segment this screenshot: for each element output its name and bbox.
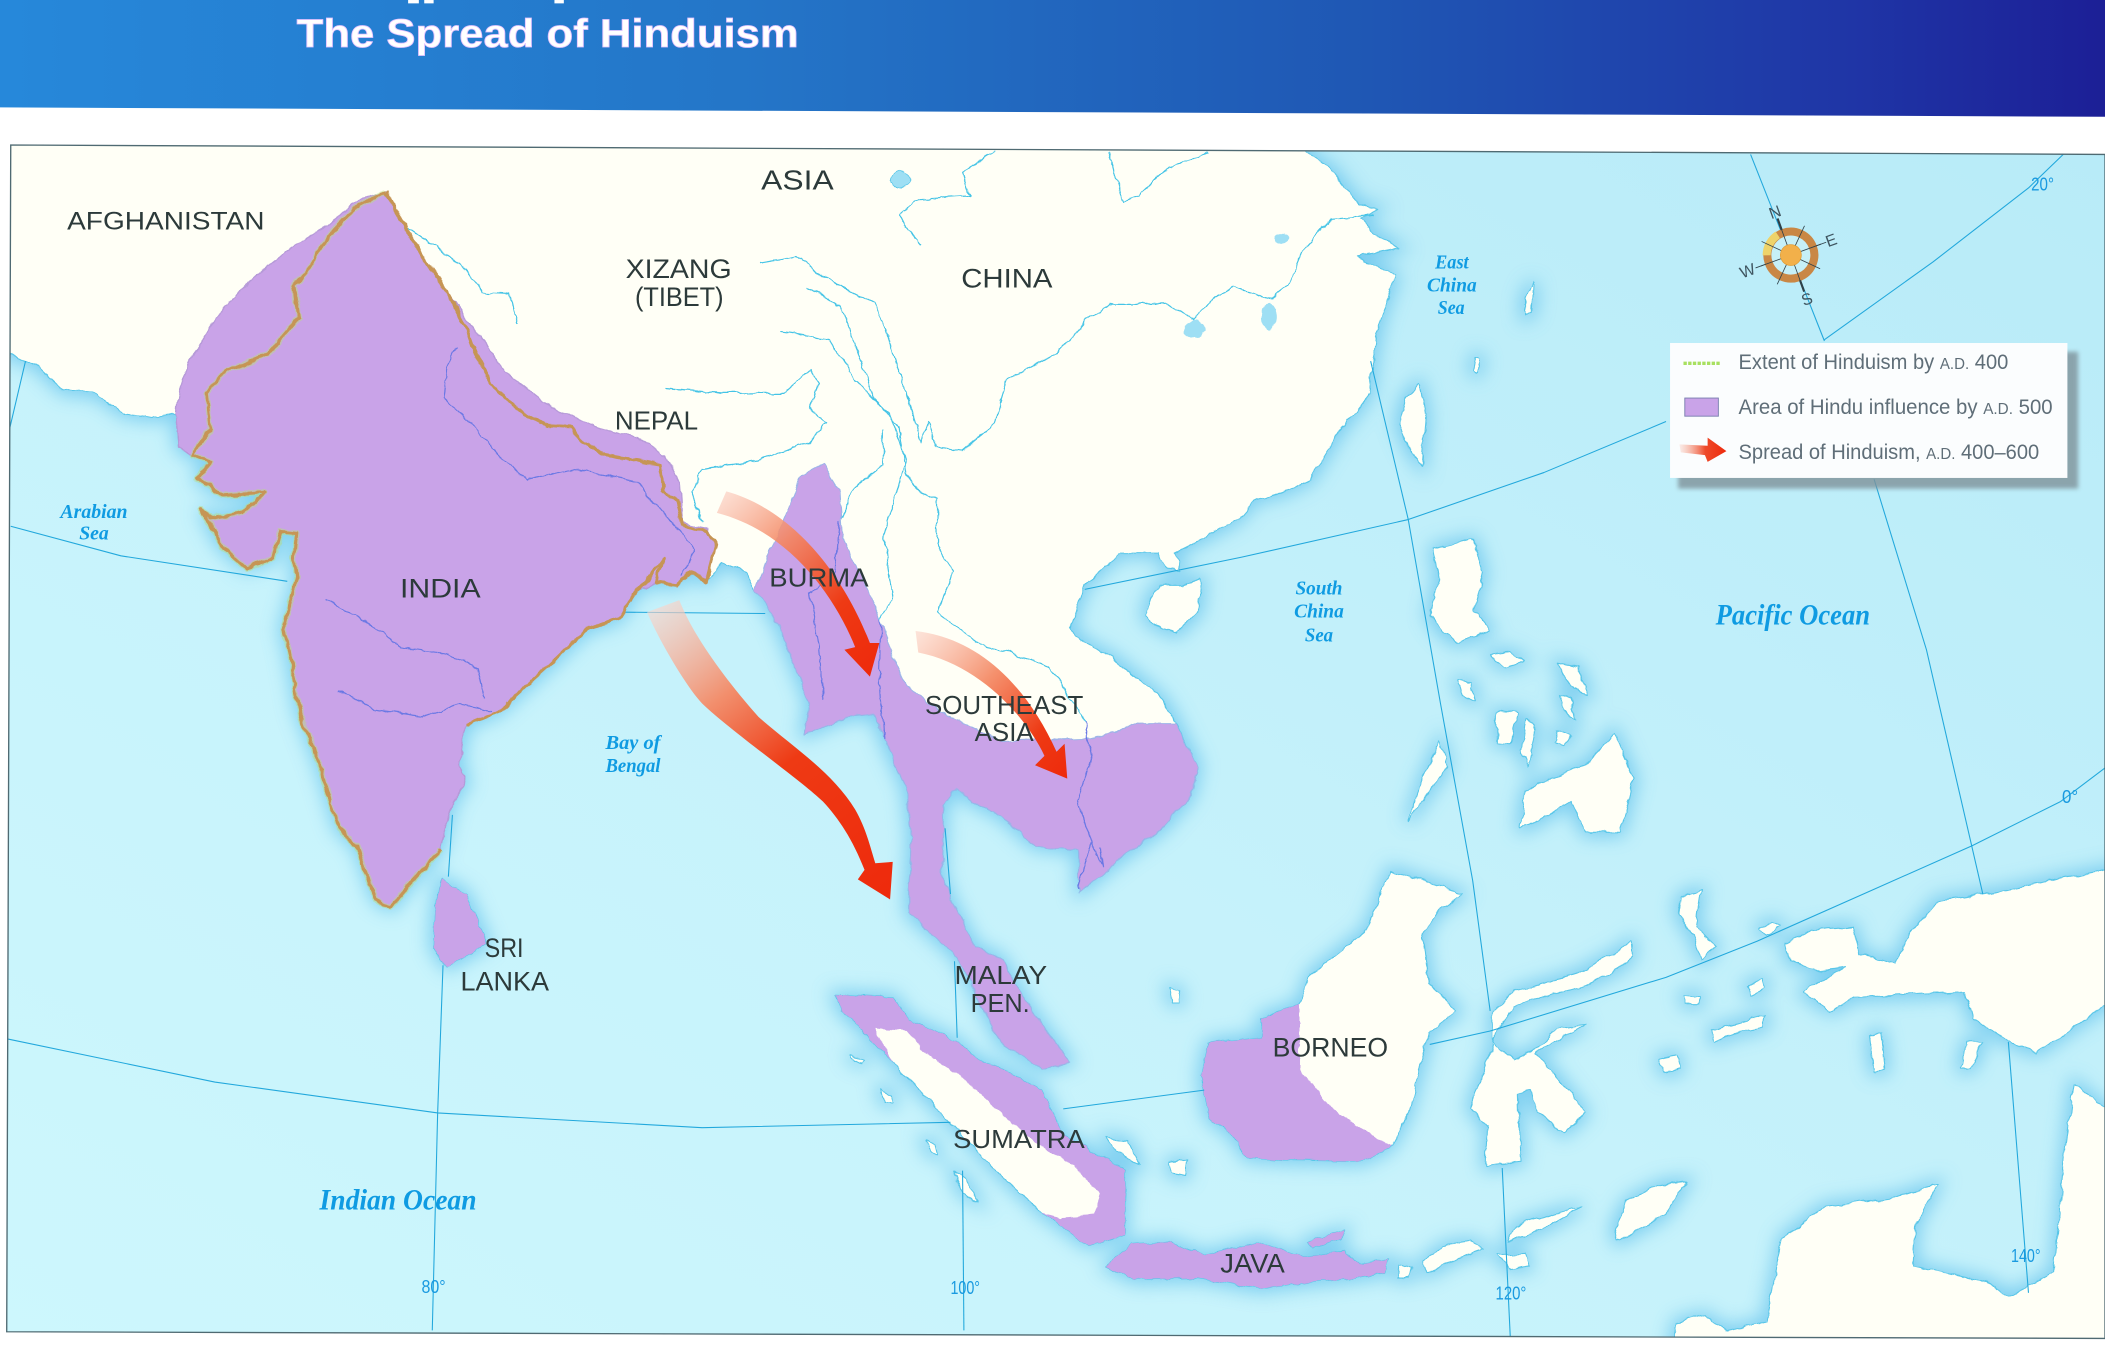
area of Hindu influence: India	[176, 192, 716, 908]
land labels: BURMA	[769, 565, 869, 593]
sea labels: Bengal	[605, 755, 661, 777]
degree labels: 0°	[2062, 786, 2078, 807]
degree labels: 140°	[2011, 1245, 2041, 1266]
land labels: ASIA	[761, 163, 834, 195]
sea labels: Pacific Ocean	[1715, 599, 1870, 631]
land labels: LANKA	[460, 967, 549, 997]
land labels: SOUTHEAST	[925, 692, 1083, 720]
compass rose: E	[1823, 230, 1840, 251]
land labels: XIZANG	[626, 254, 732, 284]
sea labels: Indian Ocean	[319, 1185, 477, 1217]
area of Hindu influence: Sumatra	[835, 995, 1126, 1246]
land labels: SUMATRA	[953, 1126, 1085, 1154]
degree labels: 120°	[1496, 1283, 1526, 1304]
land labels: SRI	[485, 933, 524, 963]
land labels: (TIBET)	[635, 282, 724, 312]
area of Hindu influence: Southeast Asia	[756, 465, 1197, 1069]
arrow: spread into Burma	[717, 491, 879, 677]
land labels: BORNEO	[1273, 1033, 1388, 1063]
title: The Spread of Hinduism	[297, 11, 799, 56]
land labels: INDIA	[400, 573, 481, 603]
compass rose: N	[1767, 202, 1784, 223]
compass rose: S	[1799, 289, 1815, 310]
sea labels: South	[1295, 578, 1342, 600]
land labels: PEN.	[971, 990, 1030, 1018]
rivers within influence area	[325, 346, 1104, 890]
lakes and rivers of Asia	[408, 152, 1373, 721]
land labels: MALAY	[954, 962, 1047, 990]
sea labels: China	[1294, 601, 1344, 623]
legend item: influence by A.D. 500: Area of Hindu influence by A.D. 500	[1739, 395, 2053, 419]
degree labels: 100°	[950, 1277, 980, 1298]
sea labels: Sea	[1305, 625, 1333, 647]
land labels: AFGHANISTAN	[67, 209, 264, 236]
sea labels: China	[1427, 274, 1477, 296]
legend item: extent by A.D. 400: Extent of Hinduism by A.D. 400	[1739, 350, 2008, 374]
land labels	[67, 163, 1388, 1279]
land labels: CHINA	[961, 263, 1053, 293]
land labels: JAVA	[1220, 1249, 1285, 1279]
legend	[1670, 343, 2078, 489]
sea labels	[58, 252, 1870, 1217]
degree labels: 20°	[2031, 174, 2054, 195]
compass rose: W	[1737, 260, 1759, 282]
legend item: spread A.D. 400-600: Spread of Hinduism, A.D. 400–600	[1739, 440, 2039, 464]
sea labels: Sea	[1438, 297, 1465, 319]
area of Hindu influence: Sri Lanka	[434, 879, 487, 967]
degree labels	[422, 174, 2078, 1304]
cropped line above title	[408, 0, 564, 3]
title banner	[0, 0, 2105, 117]
sea labels: East	[1434, 252, 1470, 274]
arrow: spread across Bay of Bengal	[647, 600, 893, 899]
land labels: NEPAL	[615, 406, 698, 436]
degree labels: 80°	[422, 1276, 446, 1297]
arrow: spread into Southeast Asia	[916, 631, 1067, 779]
land labels: ASIA	[975, 719, 1034, 747]
sea labels: Arabian	[58, 501, 128, 523]
area of Hindu influence: Borneo	[1202, 1004, 1391, 1161]
sea labels: Sea	[79, 523, 109, 545]
area of Hindu influence: Java	[1106, 1231, 1388, 1289]
sea labels: Bay of	[604, 732, 663, 754]
extent of Hinduism by A.D. 400 boundary	[192, 192, 716, 908]
compass rose	[1738, 205, 1838, 305]
